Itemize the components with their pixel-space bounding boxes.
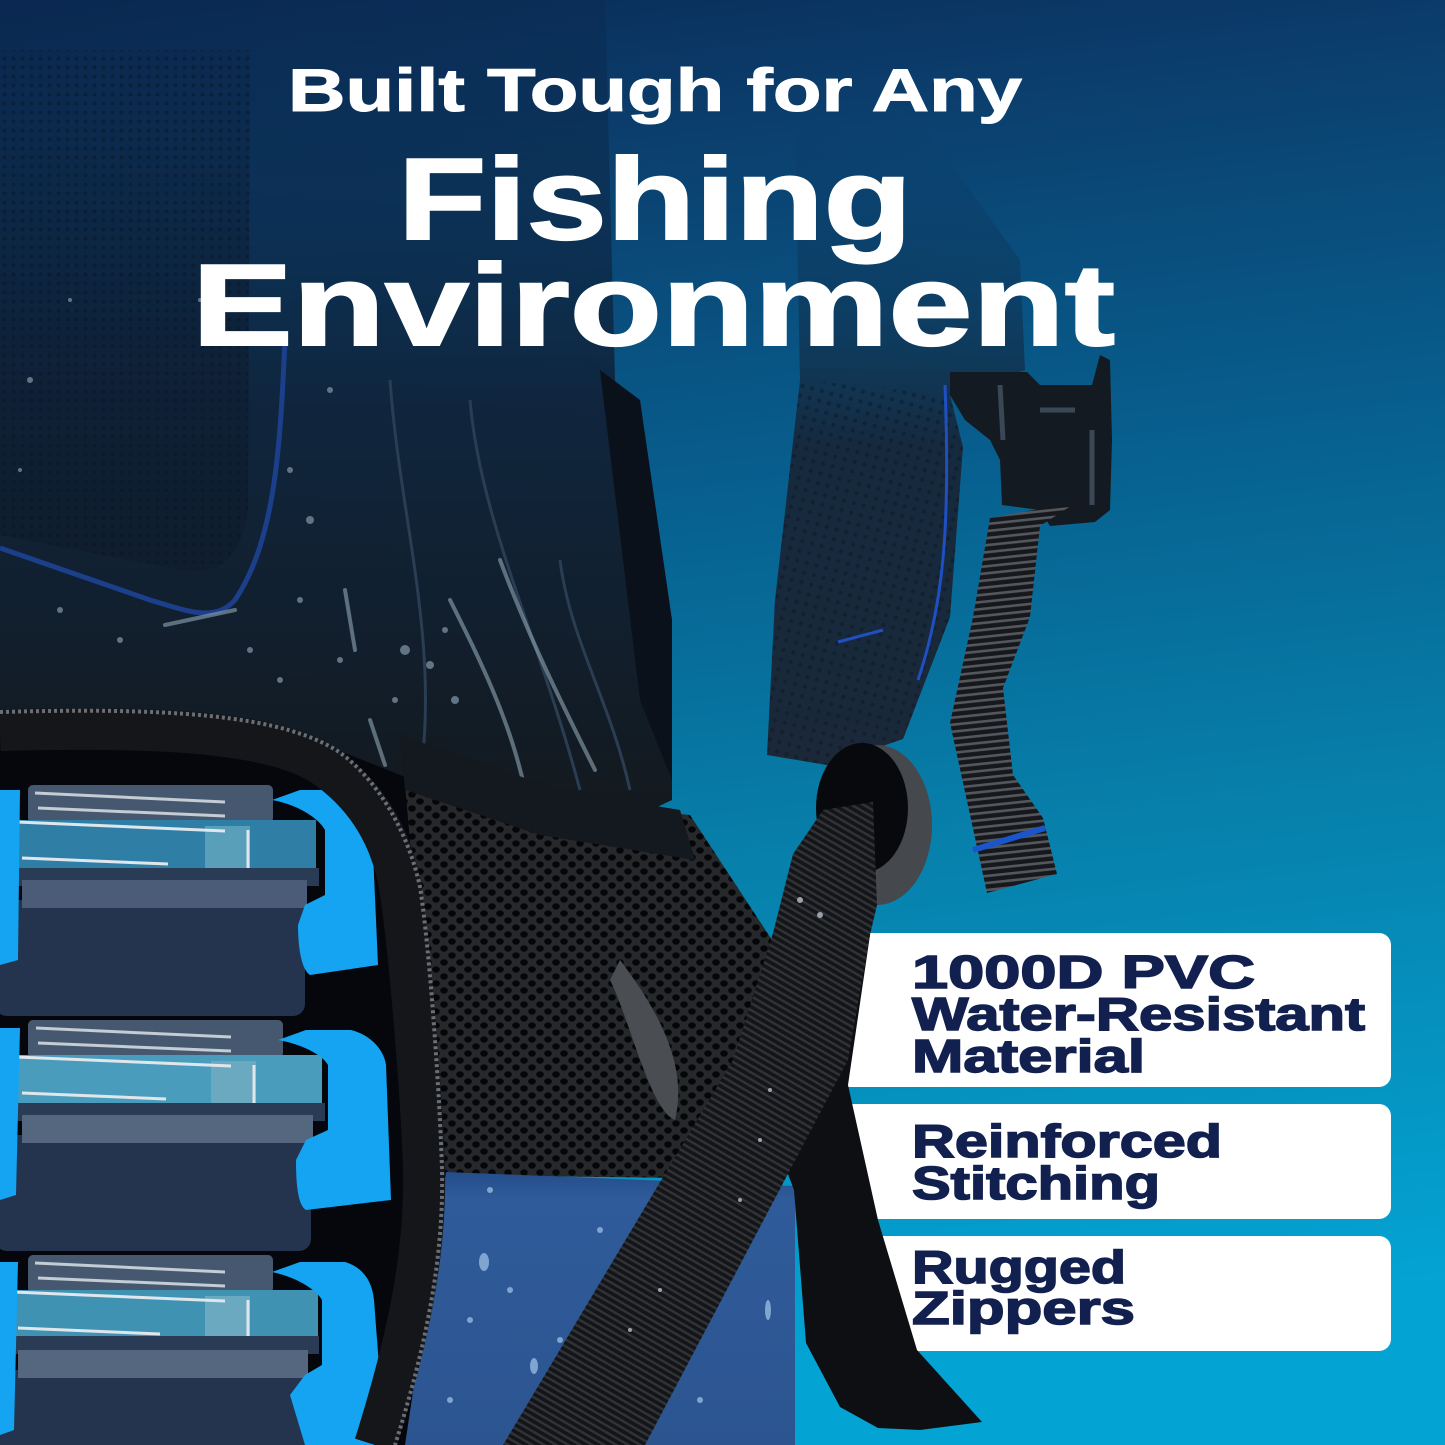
backpack upper body	[0, 0, 672, 815]
elastic band at pocket top	[400, 735, 695, 860]
card text: Material	[912, 1030, 1145, 1082]
hanging webbing strap	[950, 502, 1077, 893]
blue fabric droplets	[447, 1187, 771, 1403]
shoulder strap stitching	[838, 385, 947, 680]
card: 1000D PVC	[830, 933, 1391, 1087]
padded panel texture	[0, 50, 250, 571]
water streaks	[165, 560, 595, 790]
dark interior behind boxes	[0, 735, 455, 1445]
shoulder strap texture	[767, 380, 963, 765]
lower back strap	[760, 935, 982, 1430]
plastic buckle	[950, 355, 1112, 526]
card text: Water-Resistant	[912, 988, 1365, 1040]
card: rugged zippers	[830, 1236, 1391, 1351]
diagonal webbing strap	[503, 802, 877, 1445]
webbing blue stitch	[973, 828, 1045, 850]
tackle box stack	[0, 785, 391, 1445]
water droplets	[18, 298, 459, 704]
shoulder strap	[767, 125, 1025, 765]
tackle box 3	[0, 1255, 385, 1445]
heading: Environment: Environment	[192, 240, 1115, 370]
tackle box 1	[0, 785, 378, 1016]
feature cards	[830, 933, 1391, 1351]
card text: Rugged	[912, 1241, 1126, 1293]
front webbing straps	[503, 802, 982, 1445]
tackle box 2	[0, 1020, 391, 1251]
blue stitching	[0, 340, 285, 613]
blue lower fabric	[405, 1172, 795, 1445]
subtitle line: Built Tough for Any	[288, 57, 1023, 124]
buckle highlights	[1000, 385, 1092, 505]
heading: Fishing: Fishing	[398, 134, 912, 264]
zipper teeth	[0, 711, 442, 1445]
pivot disc shadow	[816, 743, 908, 873]
wet highlight on pocket	[610, 960, 678, 1120]
backpack photo	[0, 0, 1112, 1445]
padded back panel	[0, 50, 250, 571]
card text: Stitching	[912, 1157, 1160, 1209]
card: reinforced stitching	[830, 1104, 1391, 1219]
pack side shadow strap	[600, 370, 672, 780]
card text: Reinforced	[912, 1115, 1222, 1167]
strap pivot disc	[822, 745, 932, 905]
card text: 1000D PVC	[912, 946, 1255, 998]
zipper band	[0, 729, 424, 1445]
card text: Zippers	[912, 1282, 1135, 1334]
title	[192, 57, 1115, 370]
mesh side pocket	[405, 785, 772, 1178]
body folds	[390, 380, 630, 790]
strap droplets	[628, 897, 823, 1332]
